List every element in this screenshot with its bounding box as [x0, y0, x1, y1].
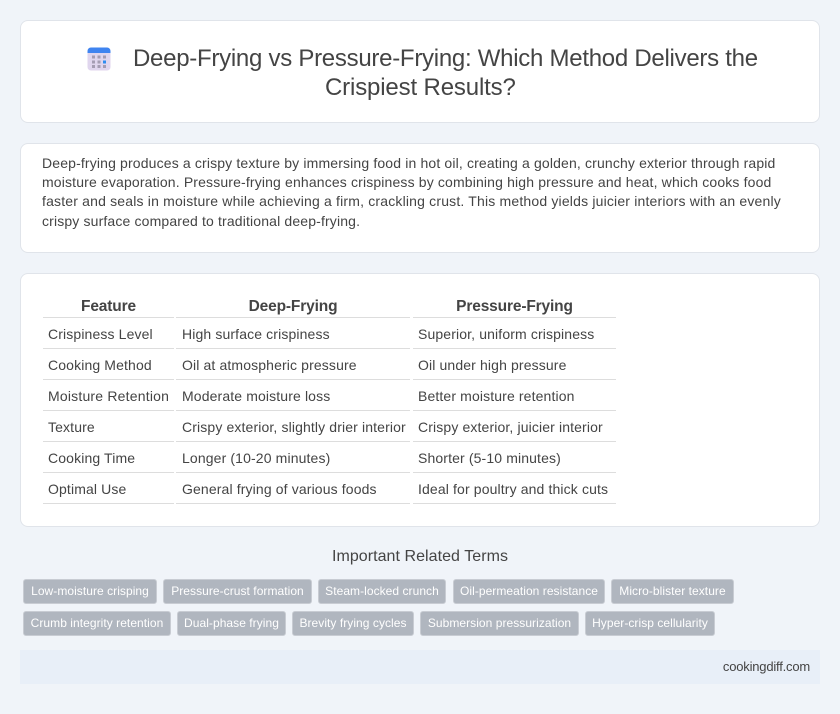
- heading: title: [133, 45, 758, 101]
- comparison table: Crispy exterior, juicier interior: [418, 419, 603, 435]
- comparison table: Oil at atmospheric pressure: [182, 357, 357, 373]
- icon: calendar grid: [88, 48, 110, 70]
- heading: related terms: Important Related Terms: [332, 548, 508, 565]
- footer text: site name: cookingdiff.com: [723, 659, 810, 674]
- panel: comparison table card: [20, 273, 820, 527]
- comparison table: Superior, uniform crispiness: [418, 326, 594, 342]
- comparison table: Cooking Time: [48, 450, 135, 466]
- tag list: related terms: Hyper-crisp cellularity: [592, 616, 708, 630]
- tag list: related terms: Micro-blister texture: [619, 584, 726, 598]
- tag list: related terms: Dual-phase frying: [184, 616, 279, 630]
- comparison table: Crispiness Level: [48, 326, 153, 342]
- comparison table: Cooking Method: [48, 357, 152, 373]
- comparison table: Feature: [81, 298, 136, 315]
- tag list: related terms: Submersion pressurization: [428, 616, 571, 630]
- text block: summary paragraph: moisture evaporation. Pressure-frying enhances crispiness by combining high pressure and heat, which cooks food: [42, 174, 771, 190]
- text block: summary paragraph: [42, 155, 781, 229]
- panel: title card: [20, 20, 820, 123]
- comparison table: Longer (10-20 minutes): [182, 450, 330, 466]
- tag list: related terms: Pressure-crust formation: [171, 584, 304, 598]
- comparison table: Moisture Retention: [48, 388, 169, 404]
- comparison table: Texture: [48, 419, 95, 435]
- text block: summary paragraph: Deep-frying produces a crispy texture by immersing food in hot oil, creating a golden, crunchy exterior through rapid: [42, 155, 775, 171]
- comparison table: High surface crispiness: [182, 326, 330, 342]
- tag list: related terms: [23, 579, 734, 636]
- tag list: related terms: Oil-permeation resistance: [460, 584, 598, 598]
- comparison table: Ideal for poultry and thick cuts: [418, 481, 608, 497]
- comparison table: Deep-Frying: [249, 298, 337, 315]
- tag list: related terms: Steam-locked crunch: [325, 584, 439, 598]
- heading: title: Crispiest Results?: [325, 74, 516, 101]
- comparison table: Better moisture retention: [418, 388, 575, 404]
- tag list: related terms: Brevity frying cycles: [299, 616, 407, 630]
- comparison table: General frying of various foods: [182, 481, 377, 497]
- comparison table: Pressure-Frying: [456, 298, 573, 315]
- panel: summary card: [20, 143, 820, 253]
- tag list: related terms: Low-moisture crisping: [31, 584, 149, 598]
- footer bar: [20, 650, 820, 684]
- comparison table: Optimal Use: [48, 481, 126, 497]
- tag list: related terms: Crumb integrity retention: [31, 616, 163, 630]
- comparison table: Shorter (5-10 minutes): [418, 450, 561, 466]
- comparison table: Oil under high pressure: [418, 357, 567, 373]
- comparison table: Crispy exterior, slightly drier interior: [182, 419, 406, 435]
- comparison table: [43, 298, 616, 504]
- text block: summary paragraph: faster and seals in moisture while achieving a firm, crackling crust. This method yields juicier interiors with an evenly: [42, 193, 781, 209]
- comparison table: Moderate moisture loss: [182, 388, 330, 404]
- text block: summary paragraph: crispy surface compared to traditional deep-frying.: [42, 213, 360, 229]
- heading: title: Deep-Frying vs Pressure-Frying: Which Method Delivers the: [133, 45, 758, 72]
